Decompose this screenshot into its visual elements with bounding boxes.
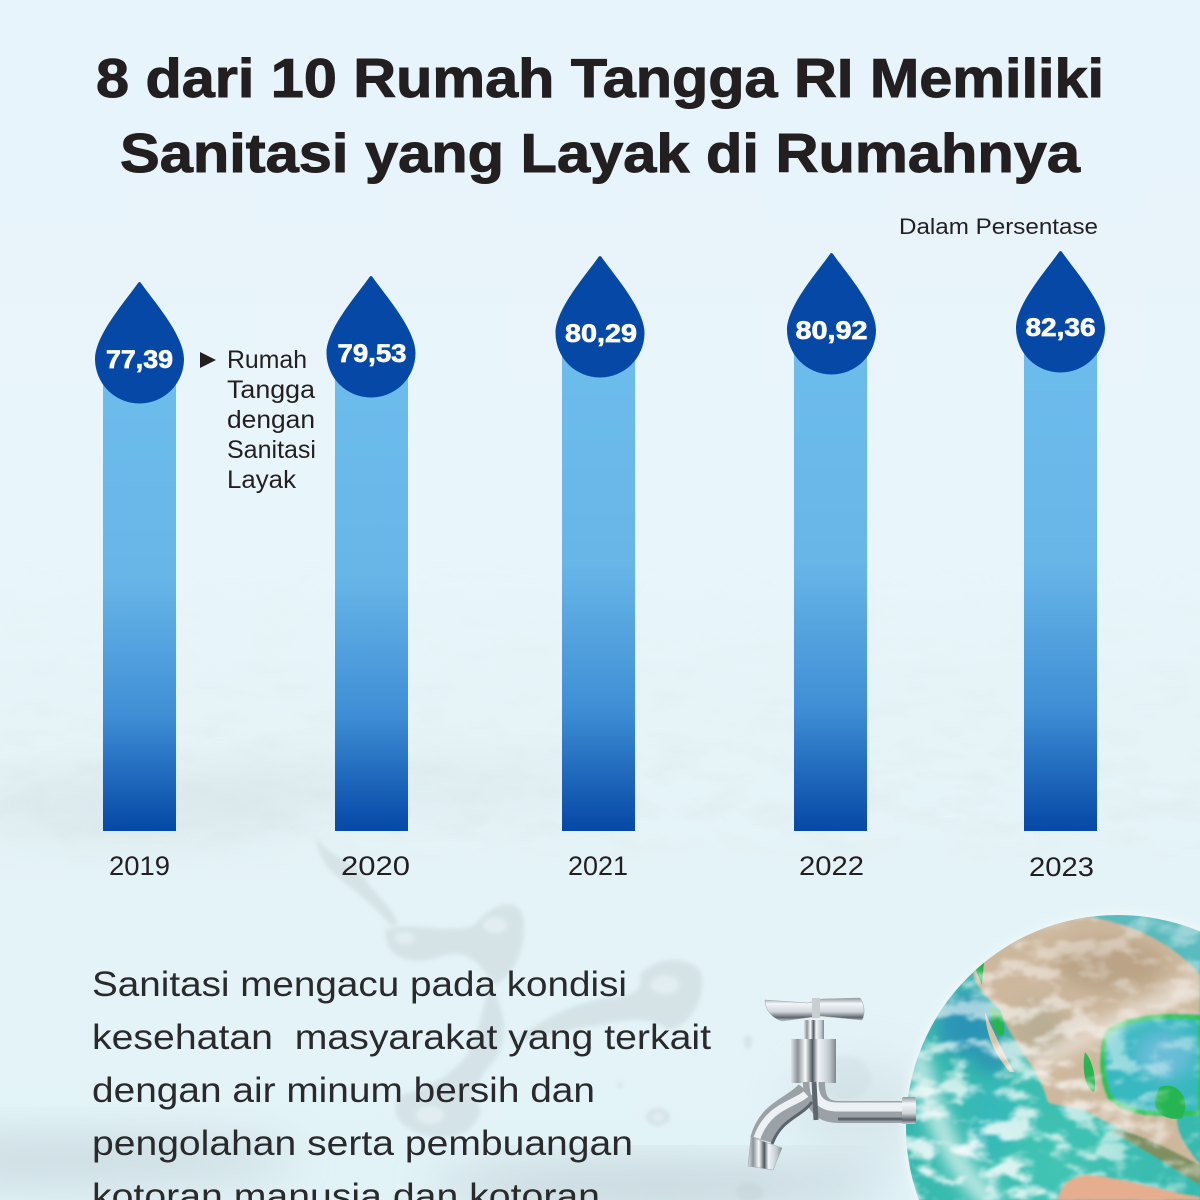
- bar 2021: 80,29: [565, 320, 637, 348]
- bar 2020: 79,53: [338, 340, 406, 368]
- faucet collar: [902, 1097, 916, 1124]
- faucet pipe and spout: [757, 1082, 905, 1144]
- gulf of mexico: [1103, 1017, 1200, 1113]
- bar 2020: [326, 276, 416, 881]
- faucet spout tip: [748, 1137, 782, 1170]
- bar 2021: [556, 256, 644, 881]
- bar 2023: [1016, 251, 1105, 882]
- bar 2019: 77,39: [106, 346, 173, 374]
- faucet handle: [765, 998, 864, 1021]
- bar 2020: 2020: [341, 851, 410, 881]
- icon: globe: [900, 905, 1200, 1200]
- legend label: Layak: [227, 466, 297, 494]
- icon: hand: [1058, 1175, 1200, 1200]
- legend label: Rumah: [227, 346, 307, 374]
- green coasts: [974, 962, 1185, 1119]
- bar chart: [95, 251, 1105, 882]
- legend label: Tangga: [227, 376, 315, 404]
- unit note: Dalam Persentase: [899, 214, 1098, 239]
- description text: dengan air minum bersih dan: [92, 1071, 595, 1110]
- icon: legend arrow: [200, 352, 216, 368]
- background with water splash: [0, 746, 1124, 1200]
- description text: kesehatan masyarakat yang terkait: [92, 1018, 711, 1057]
- icon: water faucet: [748, 998, 916, 1170]
- legend label: dengan: [227, 406, 315, 434]
- cloud cover: [900, 905, 1200, 1200]
- legend label: [227, 346, 316, 494]
- legend label: Sanitasi: [227, 436, 316, 464]
- land: north america: [973, 917, 1200, 1175]
- bar 2021: 2021: [568, 851, 628, 881]
- bar 2022: 2022: [799, 851, 864, 881]
- description text: Sanitasi mengacu pada kondisi: [92, 965, 627, 1004]
- legend: [200, 346, 316, 494]
- bar 2022: 80,92: [796, 317, 868, 345]
- bar 2019: [95, 282, 184, 881]
- bar 2023: 2023: [1029, 852, 1094, 882]
- bar 2023: 82,36: [1026, 314, 1096, 342]
- faucet stem: [804, 1020, 824, 1040]
- title: [96, 47, 1104, 184]
- description text: pengolahan serta pembuangan: [92, 1124, 633, 1163]
- description text: [92, 965, 711, 1200]
- title: 8 dari 10 Rumah Tangga RI Memiliki: [96, 47, 1104, 109]
- bar 2019: 2019: [109, 851, 170, 881]
- bar 2022: [787, 253, 876, 881]
- faucet body: [791, 1039, 836, 1083]
- title: Sanitasi yang Layak di Rumahnya: [120, 122, 1080, 184]
- baja peninsula: [985, 1012, 1014, 1072]
